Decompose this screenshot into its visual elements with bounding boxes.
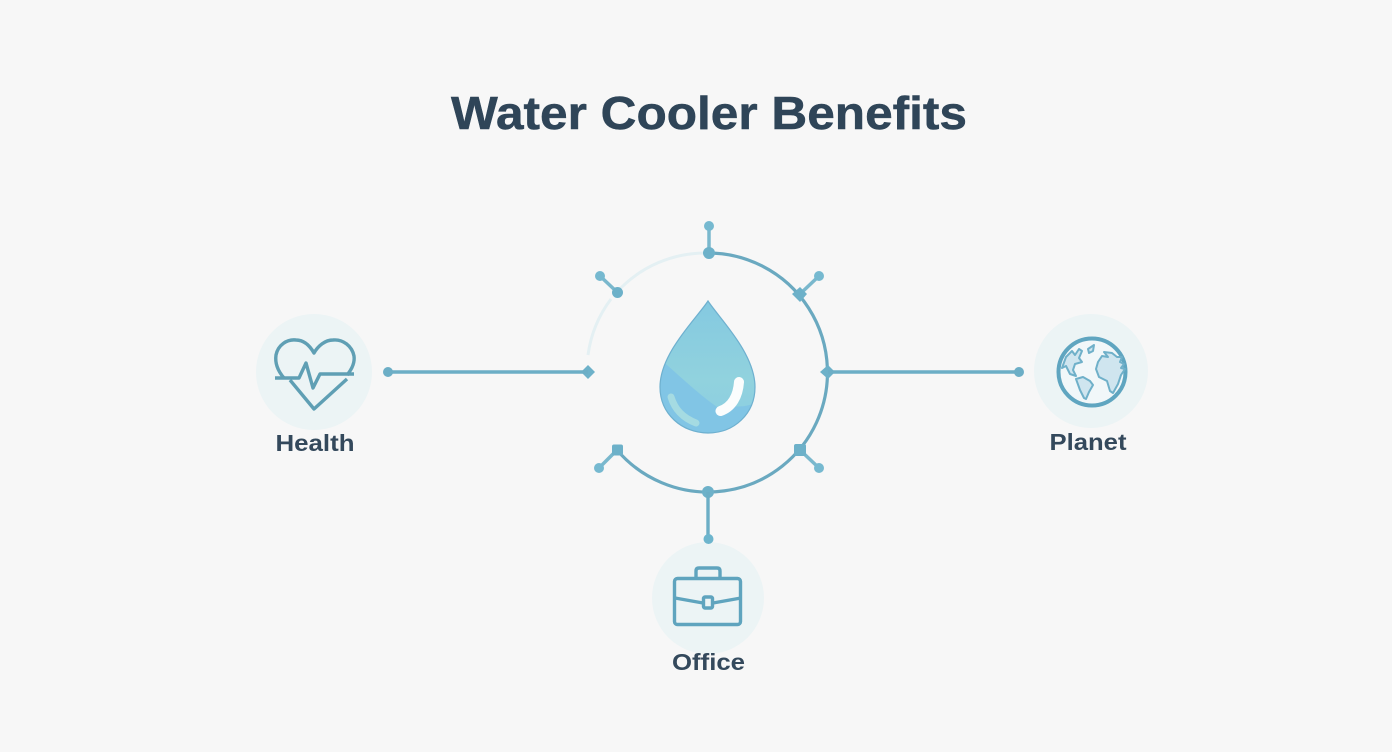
label: Office: Office	[672, 649, 745, 675]
panel: planet	[1034, 314, 1148, 455]
solid ring arc	[617, 253, 827, 492]
connector: planet	[828, 367, 1024, 377]
icon background: planet	[1034, 314, 1148, 428]
outer nodes	[594, 221, 824, 473]
icon: globe	[1058, 338, 1126, 406]
faint ring arc	[588, 253, 708, 355]
icon background: health	[256, 314, 372, 430]
spokes	[599, 226, 819, 468]
panel: office	[652, 542, 764, 675]
ring nodes	[581, 247, 835, 498]
connector: office	[704, 492, 714, 544]
label: Planet: Planet	[1050, 429, 1127, 455]
title: Water Cooler Benefits	[451, 87, 967, 139]
icon background: office	[652, 542, 764, 654]
icon: heart with pulse	[275, 340, 354, 409]
panel: health	[256, 314, 372, 456]
label: Health: Health	[276, 430, 354, 456]
central ring diagram	[581, 221, 835, 498]
icon: water drop	[659, 300, 756, 434]
icon: briefcase	[674, 568, 741, 624]
connector: health	[383, 367, 588, 377]
